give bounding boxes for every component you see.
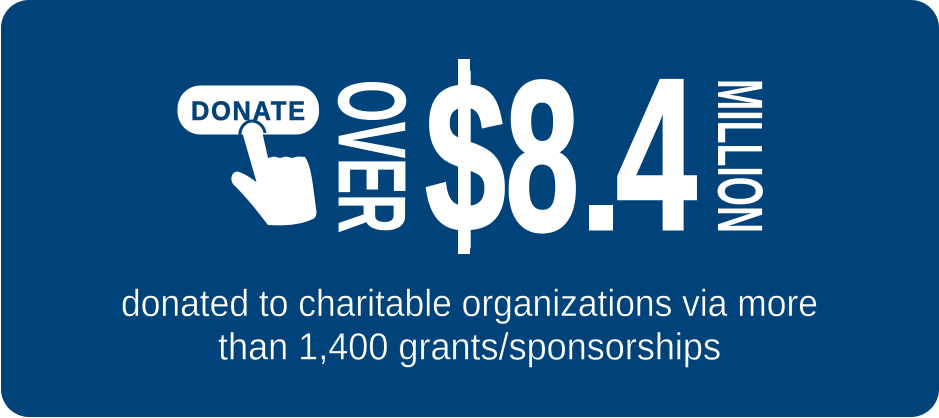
description line 2: than 1,400 grants/sponsorships <box>218 326 721 368</box>
digit 4: 4 <box>616 33 697 275</box>
description line 1: donated to charitable organizations via more <box>121 283 818 325</box>
dollar sign: $ <box>425 37 506 277</box>
digit 8: 8 <box>505 36 579 276</box>
donate button label: DONATE <box>191 95 305 126</box>
rotated word MILLION: MILLION <box>704 79 776 233</box>
description text <box>121 283 818 368</box>
rotated word OVER: OVER <box>318 80 425 233</box>
donate pill button <box>178 86 319 134</box>
headline amount: $8.4 <box>425 33 697 277</box>
pointing hand <box>231 124 316 225</box>
icon: donate button with pointing hand <box>178 86 319 225</box>
decimal point <box>589 205 613 230</box>
dollar vertical bar <box>458 59 470 254</box>
fingertip ring <box>240 121 265 137</box>
